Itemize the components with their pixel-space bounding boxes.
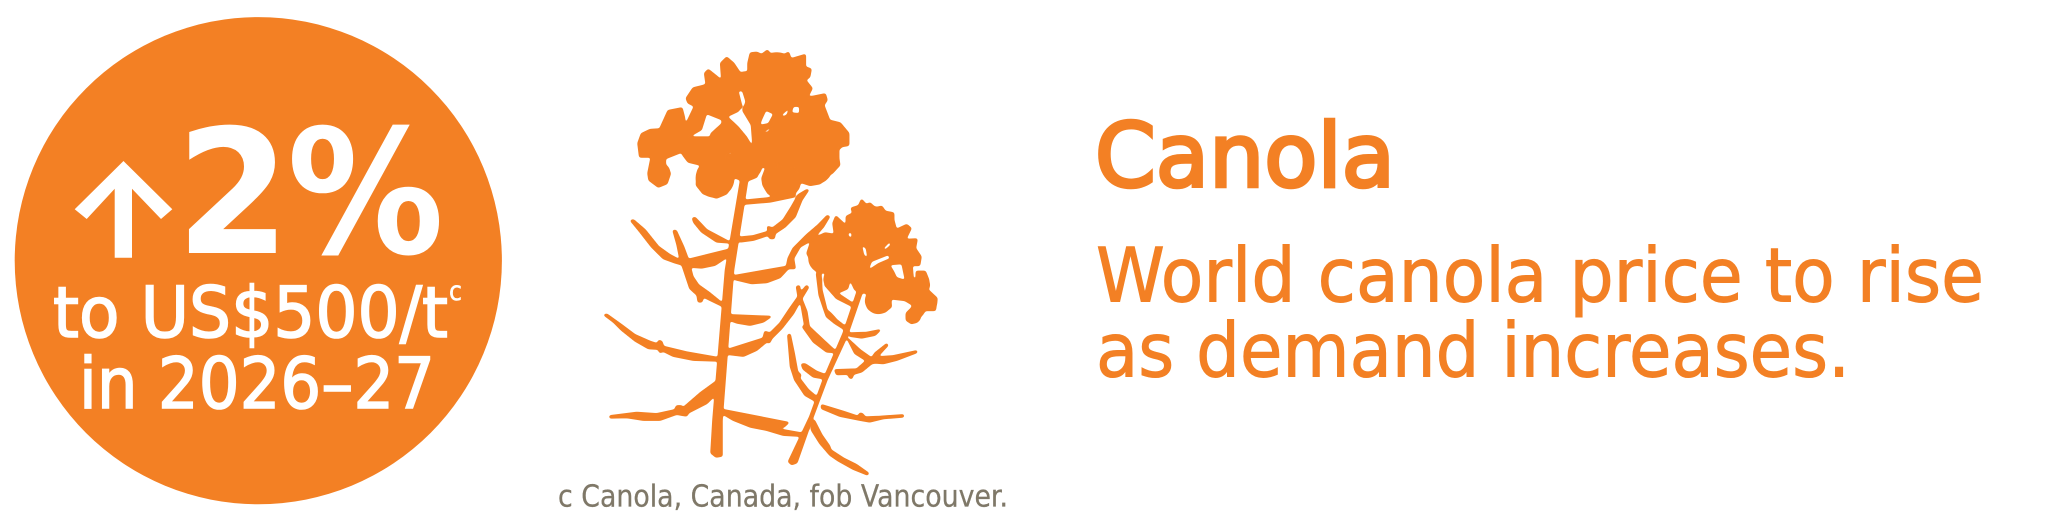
plant silhouette xyxy=(604,51,937,475)
lower branches, pods and second stem xyxy=(604,273,917,475)
heading: Canola xyxy=(1095,104,1395,208)
footnote marker c: c xyxy=(449,276,462,307)
body line 1: World canola price to rise xyxy=(1096,232,1984,320)
body line 2: as demand increases. xyxy=(1096,306,1850,394)
flower head 1 xyxy=(638,51,848,198)
flower head 2 xyxy=(807,200,937,323)
panel: price change badge xyxy=(15,17,502,504)
stat: 2%: 2 xyxy=(176,92,290,294)
text: year: in 2026–27 xyxy=(79,343,435,425)
main stem xyxy=(711,178,748,457)
panel: headline text xyxy=(1095,104,1984,394)
footnote: c Canola, Canada, fob Vancouver. xyxy=(558,480,1008,514)
upper branches and pods xyxy=(631,190,829,306)
icon: canola plant xyxy=(604,51,937,475)
stat: 2%: % xyxy=(287,92,444,294)
orange circle xyxy=(15,17,502,504)
icon: up arrow xyxy=(75,161,172,258)
text: price target: to US$500/t xyxy=(53,272,448,354)
stat: 2% xyxy=(176,92,444,294)
